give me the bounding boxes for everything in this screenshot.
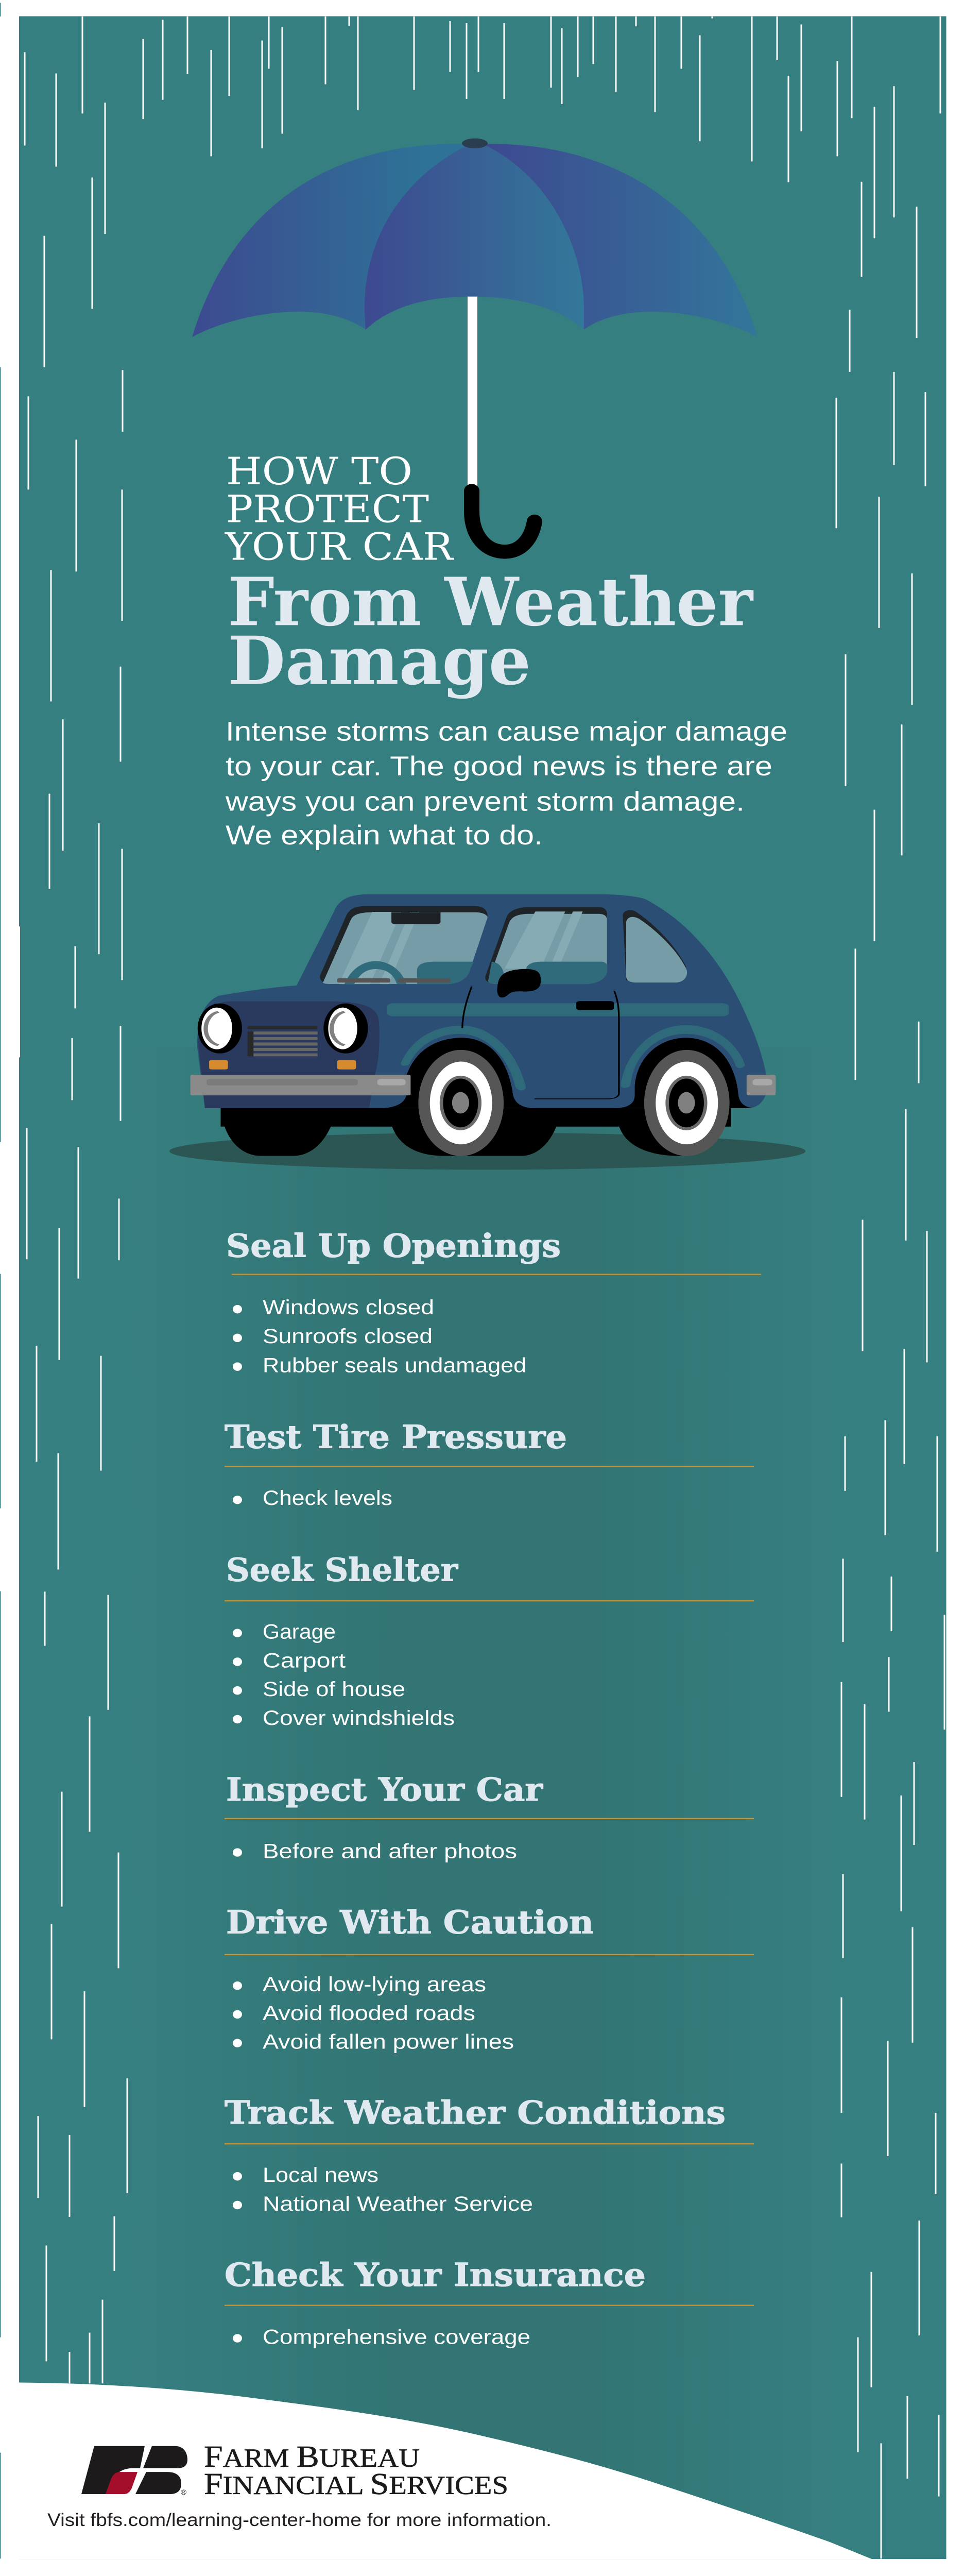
headlights [198, 1004, 368, 1054]
section: test tire pressure: Check levels [263, 1486, 392, 1510]
section: test tire pressure [225, 1418, 754, 1510]
intro text: ways you can prevent storm damage. [225, 786, 745, 817]
windshield [320, 906, 488, 984]
tires and underbody [220, 1103, 731, 1156]
intro text: to your car. The good news is there are [226, 751, 772, 781]
grille [248, 1026, 318, 1056]
logo wordmark: financial services: FINANCIAL SERVICES [204, 2467, 508, 2501]
section: drive with caution: Avoid flooded roads [263, 2002, 475, 2024]
logo mark [81, 2446, 187, 2494]
section: track weather conditions: National Weather Service [263, 2192, 533, 2215]
front bumper [191, 1075, 410, 1095]
wheel arch trim [401, 1025, 745, 1091]
umbrella [192, 139, 758, 552]
section: seek shelter: Side of house [263, 1677, 405, 1701]
door handle [576, 1001, 614, 1010]
intro text [225, 716, 787, 851]
section: inspect your car: Inspect Your Car [226, 1771, 543, 1808]
section: drive with caution: Drive With Caution [226, 1904, 594, 1941]
title line: from weather: From Weather [228, 563, 754, 641]
title line: your car: YOUR CAR [225, 526, 454, 569]
section: seek shelter: Seek Shelter [226, 1551, 458, 1589]
section: seal up openings: Rubber seals undamaged [263, 1353, 526, 1377]
ground shadow [169, 1132, 805, 1170]
intro text: We explain what to do. [226, 820, 543, 851]
section: seal up openings: Sunroofs closed [263, 1325, 433, 1347]
front wheel [418, 1050, 504, 1156]
wheel wells [381, 1038, 754, 1108]
intro text: Intense storms can cause major damage [226, 716, 787, 747]
section: seek shelter [225, 1551, 754, 1730]
umbrella right panel [483, 144, 758, 337]
section: seek shelter: Cover windshields [263, 1706, 455, 1730]
registered mark: ® [181, 2488, 186, 2497]
section: drive with caution: Avoid low-lying areas [263, 1973, 486, 1996]
title line: how to: HOW TO [226, 450, 412, 494]
farm bureau logo [81, 2440, 508, 2501]
section: seal up openings [226, 1227, 761, 1377]
section: inspect your car: Before and after photos [263, 1839, 517, 1862]
section: track weather conditions: Local news [263, 2163, 378, 2187]
side window [485, 907, 607, 984]
rear wheel [644, 1050, 730, 1156]
section: seal up openings: Seal Up Openings [226, 1227, 561, 1265]
logo wordmark: farm bureau: FARM BUREAU [204, 2440, 420, 2473]
title line: protect: PROTECT [226, 488, 429, 531]
section: check your insurance: Comprehensive coverage [263, 2325, 530, 2348]
section: seek shelter: Garage [263, 1620, 336, 1643]
umbrella center panel [365, 144, 584, 330]
car illustration [169, 894, 805, 1170]
title [225, 450, 754, 700]
section: check your insurance [225, 2257, 754, 2348]
section: test tire pressure: Test Tire Pressure [225, 1418, 567, 1456]
side stripe [387, 1003, 729, 1016]
footer call to action: Visit fbfs.com/learning-center-home for more information. [47, 2510, 552, 2530]
side mirror [497, 969, 541, 997]
umbrella knob [462, 139, 488, 148]
section: track weather conditions [225, 2094, 754, 2215]
indicator lights [209, 1060, 356, 1070]
section: track weather conditions: Track Weather Conditions [225, 2094, 726, 2131]
footer background [19, 2382, 872, 2559]
umbrella left panel [192, 144, 466, 337]
title line: damage: Damage [228, 622, 531, 700]
rear window [623, 910, 687, 982]
section: seal up openings: Windows closed [263, 1296, 434, 1319]
section: check your insurance: Check Your Insurance [225, 2257, 646, 2294]
rear bumper [747, 1075, 776, 1095]
section: seek shelter: Carport [263, 1649, 346, 1672]
umbrella shaft [468, 297, 477, 487]
car front face [198, 1001, 380, 1108]
umbrella handle [472, 491, 535, 552]
section: inspect your car [225, 1771, 754, 1862]
section: drive with caution [225, 1904, 754, 2053]
section: drive with caution: Avoid fallen power lines [263, 2030, 514, 2053]
car body [197, 894, 768, 1108]
door outline [462, 987, 619, 1099]
